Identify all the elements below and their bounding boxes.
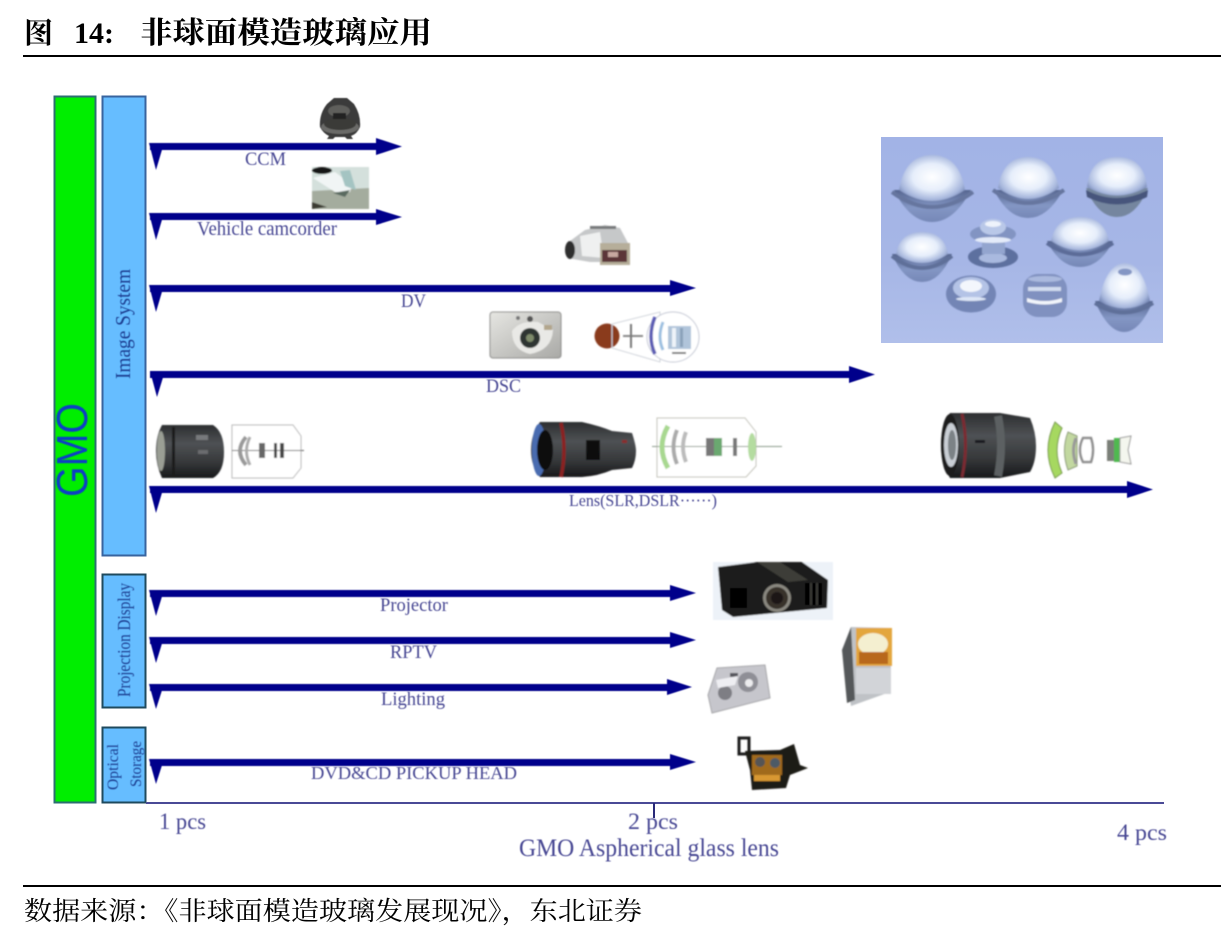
- icon: lens cross-section medium: [652, 418, 782, 477]
- lens: top left dome: [892, 155, 973, 222]
- icon: RPTV: [842, 627, 892, 706]
- icon: lens cross-section small: [232, 425, 304, 478]
- lens: top middle dome: [993, 157, 1064, 218]
- axis: [146, 802, 1164, 818]
- panel: Optical Storage: [102, 728, 146, 802]
- arrow labels: 4 pcs: [1117, 820, 1167, 845]
- icon: projector: [713, 562, 833, 620]
- icon: glass lens photo: [881, 137, 1163, 343]
- icon: coin and lens module diagram: [594, 312, 699, 362]
- panel: Image System: Image System: [111, 269, 135, 379]
- icon: digital still camera: [490, 312, 561, 358]
- arrow: Lighting: [149, 679, 692, 709]
- panel: GMO bar: [48, 96, 97, 802]
- panel: Optical Storage: Optical: [105, 743, 122, 790]
- arrow labels: DSC: [486, 376, 521, 397]
- icon: DV camcorder: [565, 225, 630, 265]
- source note: 数据来源：《非球面模造玻璃发展现况》，东北证券: [24, 897, 642, 926]
- icon: vehicle camcorder photo: [312, 167, 369, 209]
- icon: pickup head: [739, 738, 808, 790]
- arrow: DV: [149, 280, 696, 312]
- panel: Optical Storage: Storage: [128, 741, 145, 787]
- arrow labels: 1 pcs: [159, 809, 206, 834]
- arrow labels: DV: [401, 291, 426, 312]
- arrow labels: GMO Aspherical glass lens: [519, 835, 779, 862]
- icon: CCM camera module: [320, 98, 360, 139]
- lens: top right dome: [1086, 157, 1148, 217]
- panel: Projection Display: Projection Display: [114, 583, 134, 697]
- arrow labels: Lighting: [381, 689, 445, 710]
- arrow: Projector: [149, 585, 696, 616]
- arrow labels: RPTV: [390, 642, 437, 663]
- arrow labels: 2 pcs: [628, 809, 678, 834]
- icon: SLR lens large: [941, 413, 1036, 478]
- title: 14:: [74, 17, 114, 50]
- arrow labels: Vehicle camcorder: [197, 218, 337, 240]
- arrow: Lens: [149, 481, 1153, 513]
- lens: barrel lens: [1023, 274, 1067, 317]
- lens: egg-shaped lens: [1095, 263, 1153, 332]
- panel: Image System: [102, 96, 146, 556]
- panel: Projection Display: [102, 574, 146, 708]
- arrow labels: [159, 149, 1167, 862]
- diagram: [48, 96, 1167, 862]
- arrow: RPTV: [149, 632, 696, 663]
- title: 图: [24, 17, 53, 50]
- title: 非球面模造玻璃应用: [140, 17, 432, 50]
- arrow: DSC: [150, 366, 875, 397]
- panel: GMO bar: GMO: [48, 403, 97, 497]
- icon: headlight: [708, 665, 770, 713]
- title: [24, 17, 432, 50]
- arrow: CCM: [149, 138, 402, 170]
- arrow labels: Projector: [380, 595, 449, 616]
- arrow labels: DVD&CD PICKUP HEAD: [311, 763, 517, 783]
- icon: SLR lens medium: [531, 422, 636, 477]
- lens: middle left dome: [892, 232, 952, 282]
- lens: stepped centre lens: [968, 219, 1018, 268]
- arrow labels: CCM: [245, 149, 286, 170]
- icon: exploded lens elements: [1048, 422, 1131, 478]
- icon: SLR lens small: [156, 425, 224, 478]
- arrow: DVD and CD pickup head: [149, 754, 696, 784]
- arrow: Vehicle camcorder: [149, 209, 402, 240]
- lens: middle right dome: [1047, 217, 1113, 267]
- arrow labels: Lens(SLR,DSLR······): [569, 491, 717, 510]
- lens: flat lens: [946, 276, 996, 312]
